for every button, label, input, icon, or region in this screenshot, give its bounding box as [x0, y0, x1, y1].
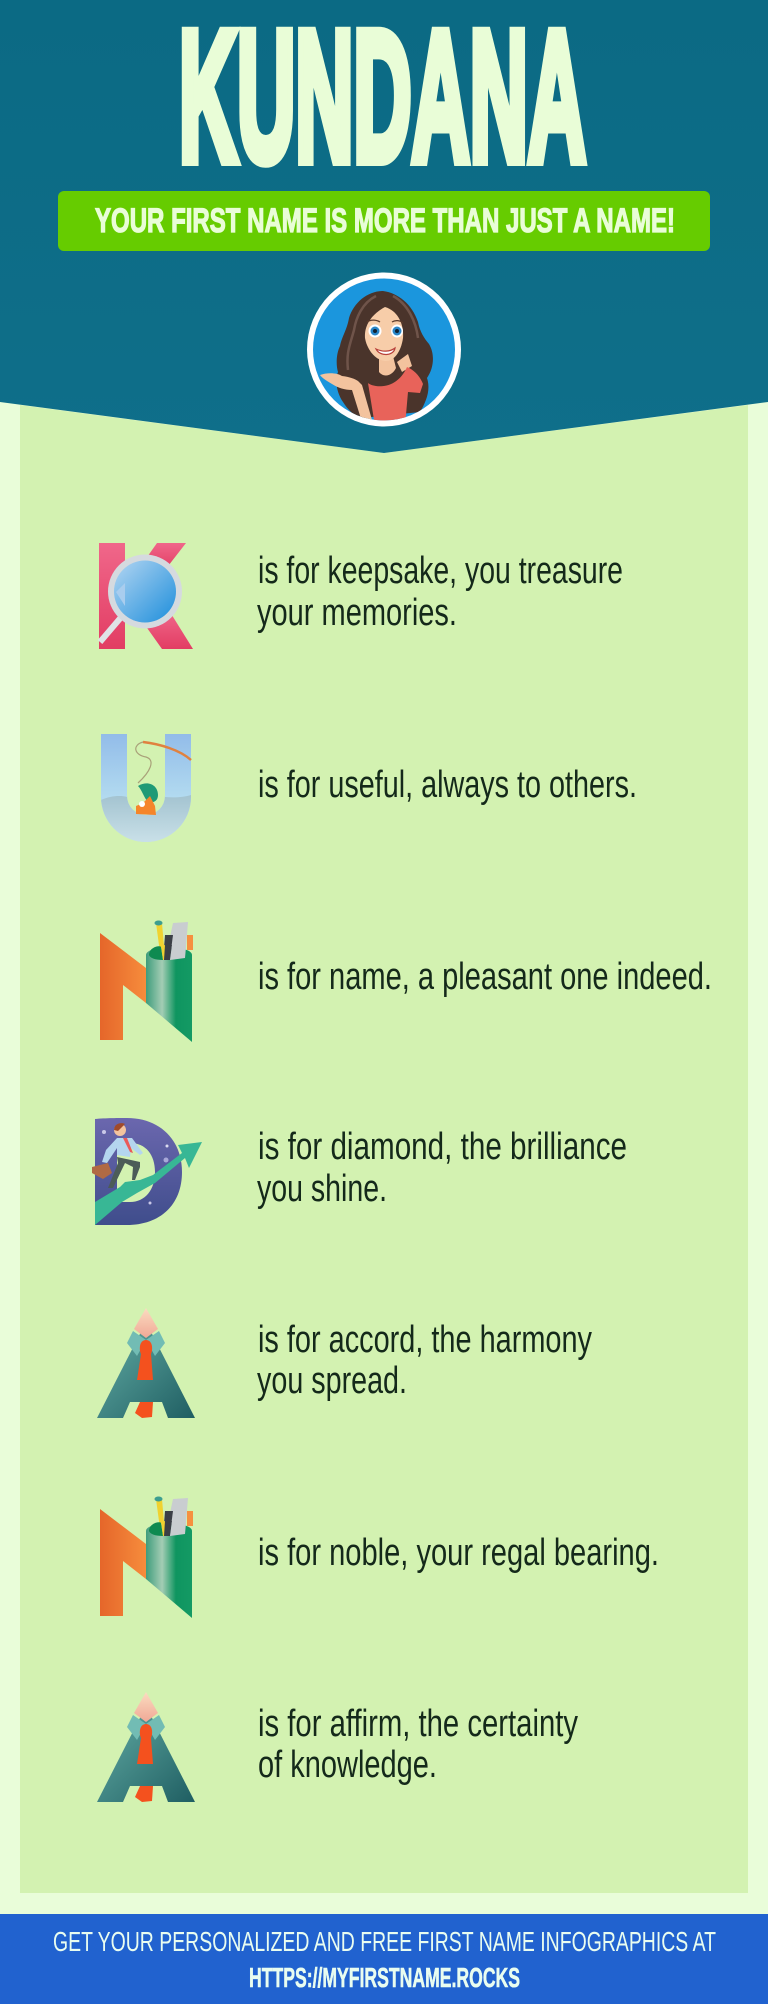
footer: HTTPS://MYFIRSTNAME.ROCKS	[249, 1962, 520, 1993]
text: second A line	[258, 1703, 578, 1786]
panel: content area	[20, 405, 748, 1893]
footer	[0, 1914, 768, 2004]
text: second N line: is for noble, your regal bearing.	[258, 1532, 659, 1574]
text: U line: is for useful, always to others.	[258, 764, 637, 806]
icon: avatar of a woman	[307, 272, 461, 426]
row: A second	[97, 1692, 578, 1802]
row: U	[101, 734, 637, 842]
text: A line	[257, 1319, 592, 1402]
icon: letter D with climbing businessman	[92, 1118, 202, 1225]
text: K line	[257, 550, 623, 634]
text: D line: you shine.	[257, 1168, 387, 1210]
icon: letter A with necktie	[97, 1692, 195, 1802]
text: second A line: of knowledge.	[258, 1744, 437, 1786]
panel: teal header	[0, 0, 768, 453]
text: second A line: is for affirm, the certainty	[258, 1703, 578, 1745]
text: A line: you spread.	[257, 1360, 407, 1402]
row: N	[100, 920, 712, 1042]
icon: letter U with fishing scene	[101, 734, 191, 842]
text: D line	[257, 1126, 627, 1210]
icon: letter A with necktie	[97, 1308, 195, 1418]
text: K line: is for keepsake, you treasure	[258, 550, 623, 592]
icon: letter K with magnifying glass	[99, 543, 193, 649]
text: A line: is for accord, the harmony	[258, 1319, 592, 1361]
subtitle banner	[58, 191, 710, 251]
icon: letter N with pencil cup	[100, 1496, 193, 1618]
icon: letter N with pencil cup	[100, 920, 193, 1042]
row: N second	[100, 1496, 659, 1618]
text: K line: your memories.	[257, 592, 457, 634]
row: K	[99, 543, 623, 649]
row: A	[97, 1308, 592, 1418]
text: D line: is for diamond, the brilliance	[258, 1126, 627, 1168]
row: D	[92, 1118, 627, 1225]
